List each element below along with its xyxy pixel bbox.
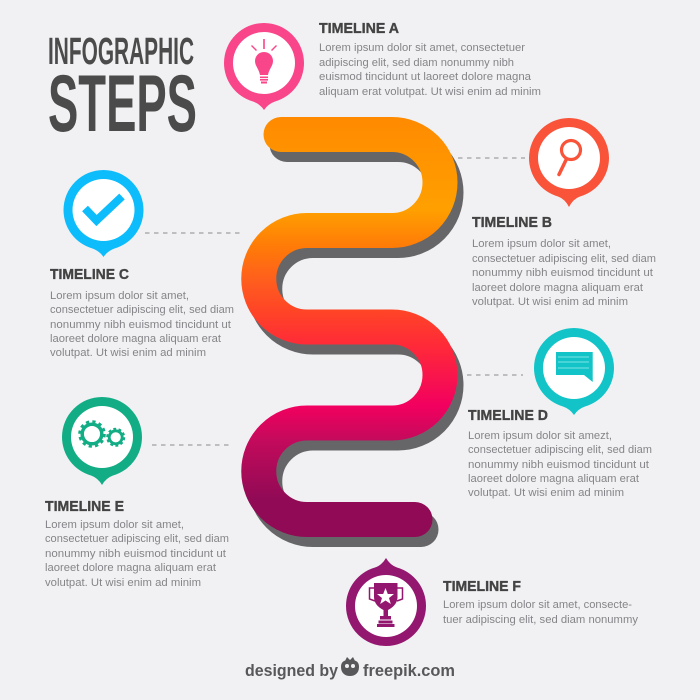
footer credit: freepik.com [363,661,455,680]
text block: Timeline E: laoreet dolore magna aliquam erat [45,562,216,574]
text block: Timeline E: TIMELINE E [45,499,124,515]
text block: Timeline D: laoreet dolore magna aliquam erat [468,473,639,485]
pin A: light bulb [224,23,304,110]
icon: gears [80,422,124,446]
icon: speech bubble [556,352,593,382]
text block: Timeline B: consectetuer adipiscing elit, sed diam [472,253,656,265]
text block: Timeline F: Lorem ipsum dolor sit amet, consecte- [443,599,632,611]
dashed connector B [458,157,525,159]
text block: Timeline C: nonummy nibh euismod tincidunt ut [50,319,231,331]
pin E: gears [62,397,142,485]
text block: Timeline F: TIMELINE F [443,579,521,595]
text block: Timeline A: TIMELINE A [319,21,400,37]
text block: Timeline E [45,499,229,589]
text block: Timeline B: volutpat. Ut wisi enim ad minim [472,296,628,308]
winding timeline ribbon [259,134,446,530]
text block: Timeline F: tuer adipiscing elit, sed diam nonummy [443,614,639,626]
pin D: speech bubble [534,328,614,415]
text block: Timeline D: consectetuer adipiscing elit, sed diam [468,444,652,456]
text block: Timeline C: Lorem ipsum dolor sit amet, [50,290,189,302]
dashed connector C [145,232,241,234]
icon: trophy [370,583,402,627]
text block: Timeline C: TIMELINE C [50,267,130,283]
text block: Timeline C: laoreet dolore magna aliquam erat [50,333,221,345]
text block: Timeline C: consectetuer adipiscing elit, sed diam [50,304,234,316]
text block: Timeline E: consectetuer adipiscing elit, sed diam [45,533,229,545]
footer credit [245,657,455,680]
text block: Timeline D: TIMELINE D [468,408,548,424]
pin C: check mark [63,170,144,257]
text block: Timeline B [472,215,656,308]
text block: Timeline A: Lorem ipsum dolor sit amet, consectetuer [319,42,525,54]
text block: Timeline D: nonummy nibh euismod tincidunt ut [468,459,649,471]
text block: Timeline D: Lorem ipsum dolor sit amezt, [468,430,612,442]
dashed connector D [467,374,523,376]
title: INFOGRAPHIC [48,31,194,73]
text block: Timeline E: nonummy nibh euismod tincidunt ut [45,548,226,560]
text block: Timeline A: aliquam erat volutpat. Ut wisi enim ad minim [319,86,541,98]
dashed connector E [152,444,230,446]
text block: Timeline D [468,408,652,499]
text block: Timeline F [443,579,639,626]
pin F: trophy [346,558,426,646]
text block: Timeline A: euismod tincidunt ut laoreet dolore magna [319,71,532,83]
footer credit: designed by [245,661,339,680]
icon: light bulb [251,39,277,84]
text block: Timeline A [319,21,541,98]
title: STEPS [48,59,197,149]
text block: Timeline E: volutpat. Ut wisi enim ad minim [45,577,201,589]
text block: Timeline D: volutpat. Ut wisi enim ad minim [468,487,624,499]
text block: Timeline B: Lorem ipsum dolor sit amet, [472,238,611,250]
text block: Timeline B: nonummy nibh euismod tincidunt ut [472,267,653,279]
text block: Timeline C [50,267,234,359]
pin B: magnifier [529,118,609,207]
text block: Timeline C: volutpat. Ut wisi enim ad minim [50,347,206,359]
icon: magnifier [559,140,580,174]
title [48,31,197,149]
text block: Timeline A: adipiscing elit, sed diam nonummy nibh [319,57,514,69]
text block: Timeline B: laoreet dolore magna aliquam erat [472,282,643,294]
icon: freepik logo [341,657,359,676]
text block: Timeline E: Lorem ipsum dolor sit amet, [45,519,184,531]
icon: check mark [85,196,122,220]
text block: Timeline B: TIMELINE B [472,215,552,231]
